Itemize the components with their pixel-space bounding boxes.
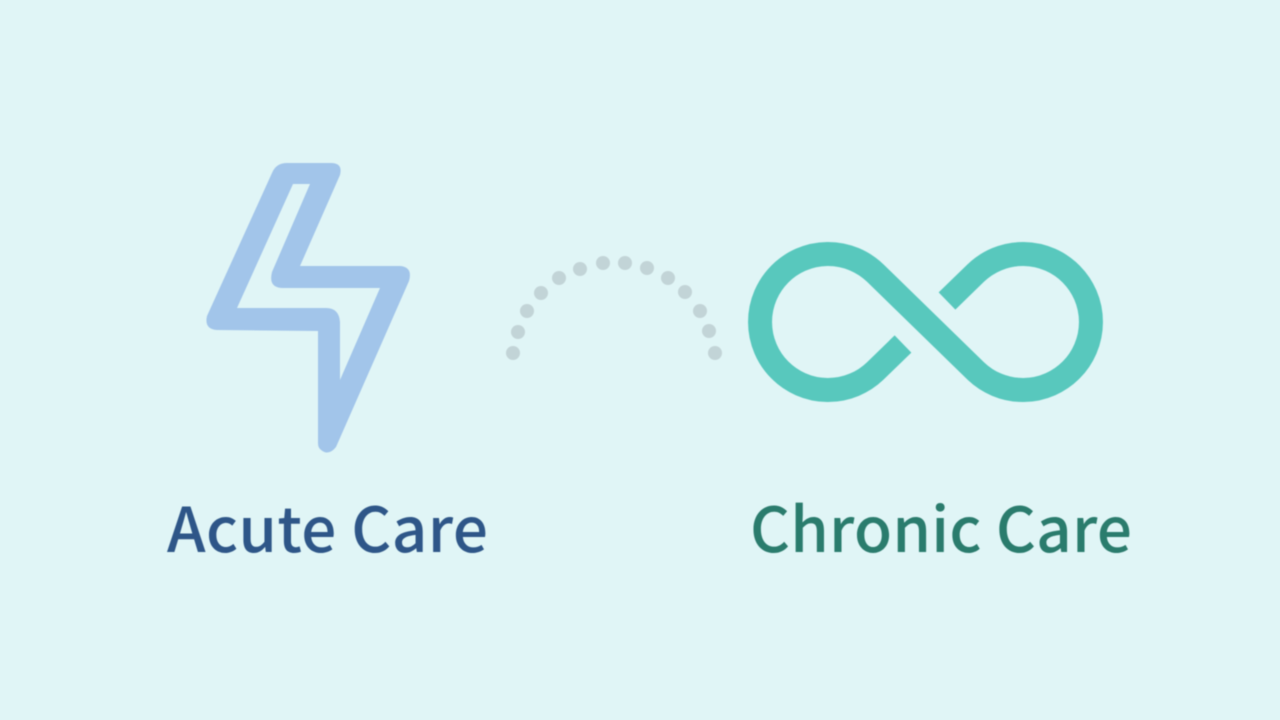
heading: Chronic Care: Chronic Care [750, 480, 1132, 570]
icon: infinity symbol [760, 254, 1091, 390]
heading: Acute Care: Acute Care [167, 480, 488, 570]
icon: lightning bolt [206, 163, 410, 453]
dotted arc connector [506, 256, 722, 360]
